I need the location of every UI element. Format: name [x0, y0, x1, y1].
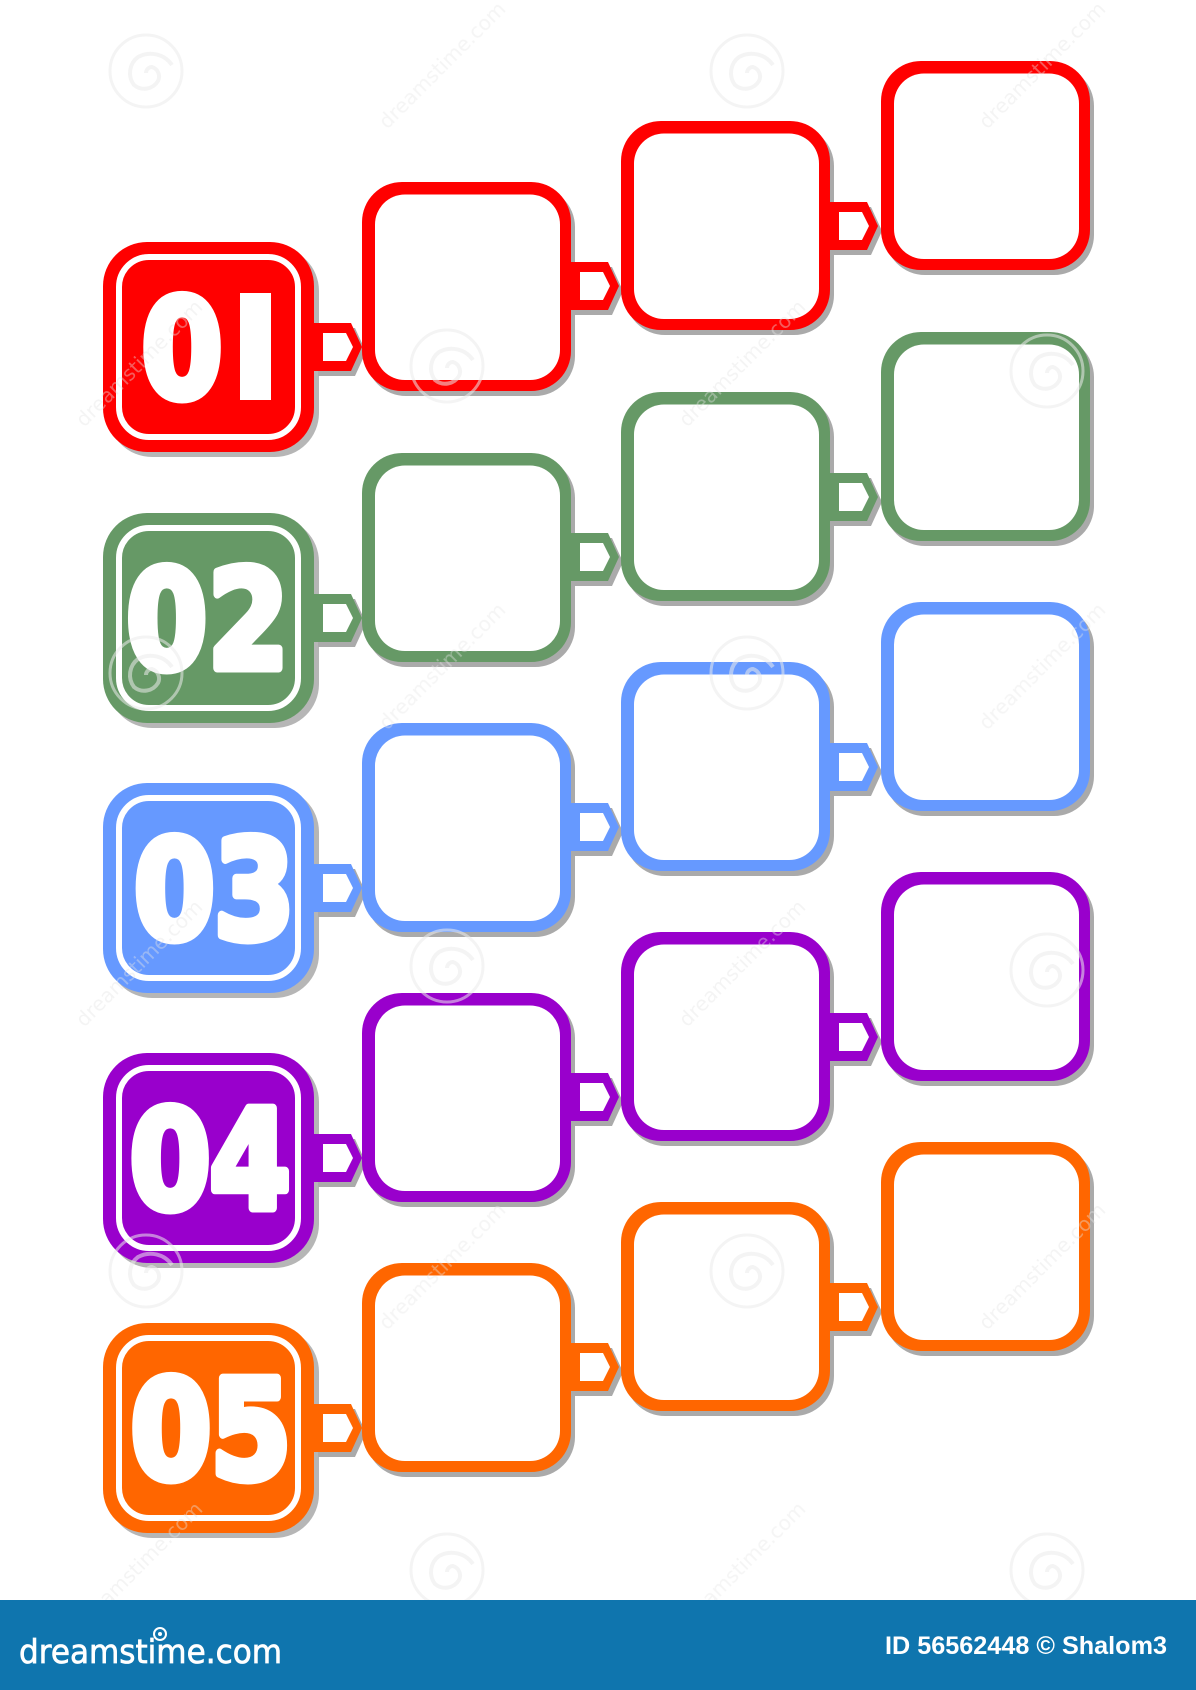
- banner credit text: ID 56562448 © Shalom3: [885, 1632, 1167, 1660]
- watermark text: dreamstime.com: [71, 1497, 207, 1633]
- row 3: blue: [103, 602, 1094, 998]
- step box 2: [621, 932, 834, 1146]
- row 1: red: [103, 61, 1094, 457]
- connector: box 1 to box 2: [567, 803, 623, 856]
- numbered badge 01: 1: [207, 271, 303, 430]
- watermark text: dreamstime.com: [974, 1198, 1110, 1334]
- connector: box 1 to box 2: [567, 1073, 623, 1126]
- connector: badge to box 1: [310, 594, 366, 647]
- numbered badge 02: [103, 513, 319, 728]
- connector: box 2 to box 3: [826, 1283, 882, 1336]
- numbered badge 01: 0: [142, 270, 223, 429]
- watermark text: dreamstime.com: [374, 1198, 510, 1334]
- step box 3: [881, 61, 1094, 275]
- watermark text: dreamstime.com: [974, 598, 1110, 734]
- connector: badge to box 1: [310, 864, 366, 917]
- watermark text: dreamstime.com: [71, 895, 207, 1031]
- watermark text: dreamstime.com: [674, 895, 810, 1031]
- step box 3: [881, 602, 1094, 816]
- numbered badge 03: [103, 783, 319, 998]
- bottom banner: [0, 1600, 1196, 1690]
- connector: box 2 to box 3: [826, 473, 882, 526]
- numbered badge 02: 2: [208, 541, 289, 700]
- watermark text: dreamstime.com: [71, 295, 207, 431]
- step box 1: [362, 723, 575, 937]
- step box 3: [881, 332, 1094, 546]
- connector: box 2 to box 3: [826, 1013, 882, 1066]
- numbered badge 04: 4: [210, 1081, 291, 1240]
- watermark spirals: [110, 35, 1083, 1606]
- step box 1: [362, 182, 575, 396]
- numbered badge 05: [103, 1323, 319, 1538]
- watermark text: dreamstime.com: [674, 1497, 810, 1633]
- step box 2: [621, 392, 834, 606]
- step box 1: [362, 453, 575, 667]
- connector: box 1 to box 2: [567, 262, 623, 315]
- step box 2: [621, 121, 834, 335]
- connector: badge to box 1: [310, 323, 366, 376]
- numbered badge 02: 0: [126, 541, 207, 700]
- numbered badge 05: 5: [210, 1351, 291, 1510]
- step box 3: [881, 1142, 1094, 1356]
- watermark text: dreamstime.com: [974, 0, 1110, 133]
- connector: badge to box 1: [310, 1134, 366, 1187]
- connector: box 2 to box 3: [826, 202, 882, 255]
- connector: box 2 to box 3: [826, 743, 882, 796]
- numbered badge 03: 0: [134, 811, 215, 970]
- row 4: purple: [103, 872, 1094, 1268]
- numbered badge 03: 3: [214, 811, 295, 970]
- connector: badge to box 1: [310, 1404, 366, 1457]
- numbered badge 01: [103, 242, 319, 457]
- step box 2: [621, 1202, 834, 1416]
- numbered badge 04: [103, 1053, 319, 1268]
- connector: box 1 to box 2: [567, 533, 623, 586]
- connector: box 1 to box 2: [567, 1343, 623, 1396]
- banner logo: dreamstime.com: dreamstime.com: [19, 1632, 282, 1671]
- step box 1: [362, 993, 575, 1207]
- step box 2: [621, 662, 834, 876]
- numbered badge 04: 0: [130, 1081, 211, 1240]
- watermark text: dreamstime.com: [374, 598, 510, 734]
- row 2: green: [103, 332, 1094, 728]
- step box 3: [881, 872, 1094, 1086]
- step box 1: [362, 1263, 575, 1477]
- watermark text: dreamstime.com: [374, 0, 510, 133]
- numbered badge 05: 0: [130, 1351, 212, 1510]
- watermark text: dreamstime.com: [674, 295, 810, 431]
- row 5: orange: [103, 1142, 1094, 1538]
